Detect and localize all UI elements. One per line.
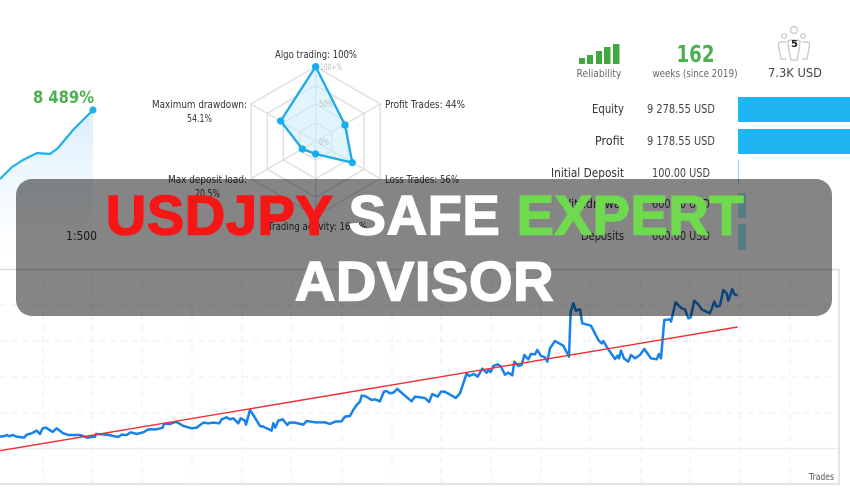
radar chart bbox=[152, 49, 465, 233]
title line 1: USDJPY SAFE EXPERT bbox=[106, 184, 744, 246]
table row labels: Withdrawal bbox=[560, 197, 624, 211]
growth line bbox=[0, 110, 93, 179]
radar axis labels: Maximum drawdown: bbox=[152, 99, 247, 111]
table row labels: Initial Deposit bbox=[551, 166, 624, 180]
table row values: 9 178.55 USD bbox=[647, 134, 715, 148]
table row labels: Profit bbox=[595, 134, 624, 148]
balance line bbox=[0, 289, 738, 438]
radar axis labels: 54.1% bbox=[187, 113, 212, 125]
radar axis labels: Profit Trades: 44% bbox=[385, 99, 465, 111]
chart frame and grid bbox=[0, 270, 839, 484]
title banner background bbox=[16, 179, 832, 316]
growth area fill bbox=[0, 110, 93, 260]
reliability label: Reliability bbox=[576, 68, 622, 80]
radar axis labels: 20.5% bbox=[195, 188, 220, 200]
radar grid bbox=[251, 67, 380, 216]
radar scale labels: 0% bbox=[319, 138, 329, 148]
trades axis label: Trades bbox=[808, 472, 834, 483]
title line 2: ADVISOR bbox=[295, 250, 554, 312]
weeks label: weeks (since 2019) bbox=[652, 68, 738, 80]
growth end marker bbox=[89, 106, 97, 114]
panel: account table bbox=[551, 97, 850, 250]
radar scale labels bbox=[319, 63, 342, 148]
panel: growth mini chart bbox=[0, 88, 97, 260]
table row values: 600.00 USD bbox=[652, 229, 710, 243]
radar axis labels: Loss Trades: 56% bbox=[385, 174, 459, 186]
radar scale labels: 100+% bbox=[320, 63, 342, 73]
table row labels: Equity bbox=[592, 102, 624, 116]
icon: subscribers group bbox=[778, 26, 810, 60]
title bbox=[106, 184, 744, 312]
table row labels: Deposits bbox=[581, 229, 624, 243]
table row values: 100.00 USD bbox=[652, 166, 710, 180]
radar axis labels: Trading activity: 16.4% bbox=[267, 221, 367, 233]
subscribers number: 5 bbox=[791, 39, 798, 50]
subscribers value: 7.3K USD bbox=[768, 65, 822, 80]
table row values: 9 278.55 USD bbox=[647, 102, 715, 116]
table bars bbox=[738, 97, 850, 250]
trend line bbox=[0, 327, 738, 451]
leverage value: 1:500 bbox=[66, 229, 97, 243]
radar data polygon bbox=[277, 63, 356, 166]
table row labels bbox=[551, 102, 624, 243]
radar scale labels: 50% bbox=[319, 100, 333, 110]
growth percentage: 8 489% bbox=[33, 88, 94, 108]
panel: balance line chart bbox=[0, 270, 839, 484]
radar axis labels: Max deposit load: bbox=[168, 174, 247, 186]
radar axis labels: Algo trading: 100% bbox=[275, 49, 357, 61]
table row values: 600.00 USD bbox=[652, 197, 710, 211]
icon: reliability bars bbox=[579, 44, 620, 64]
table row values bbox=[647, 102, 715, 243]
weeks count: 162 bbox=[676, 42, 714, 68]
radar axis labels bbox=[152, 49, 465, 233]
